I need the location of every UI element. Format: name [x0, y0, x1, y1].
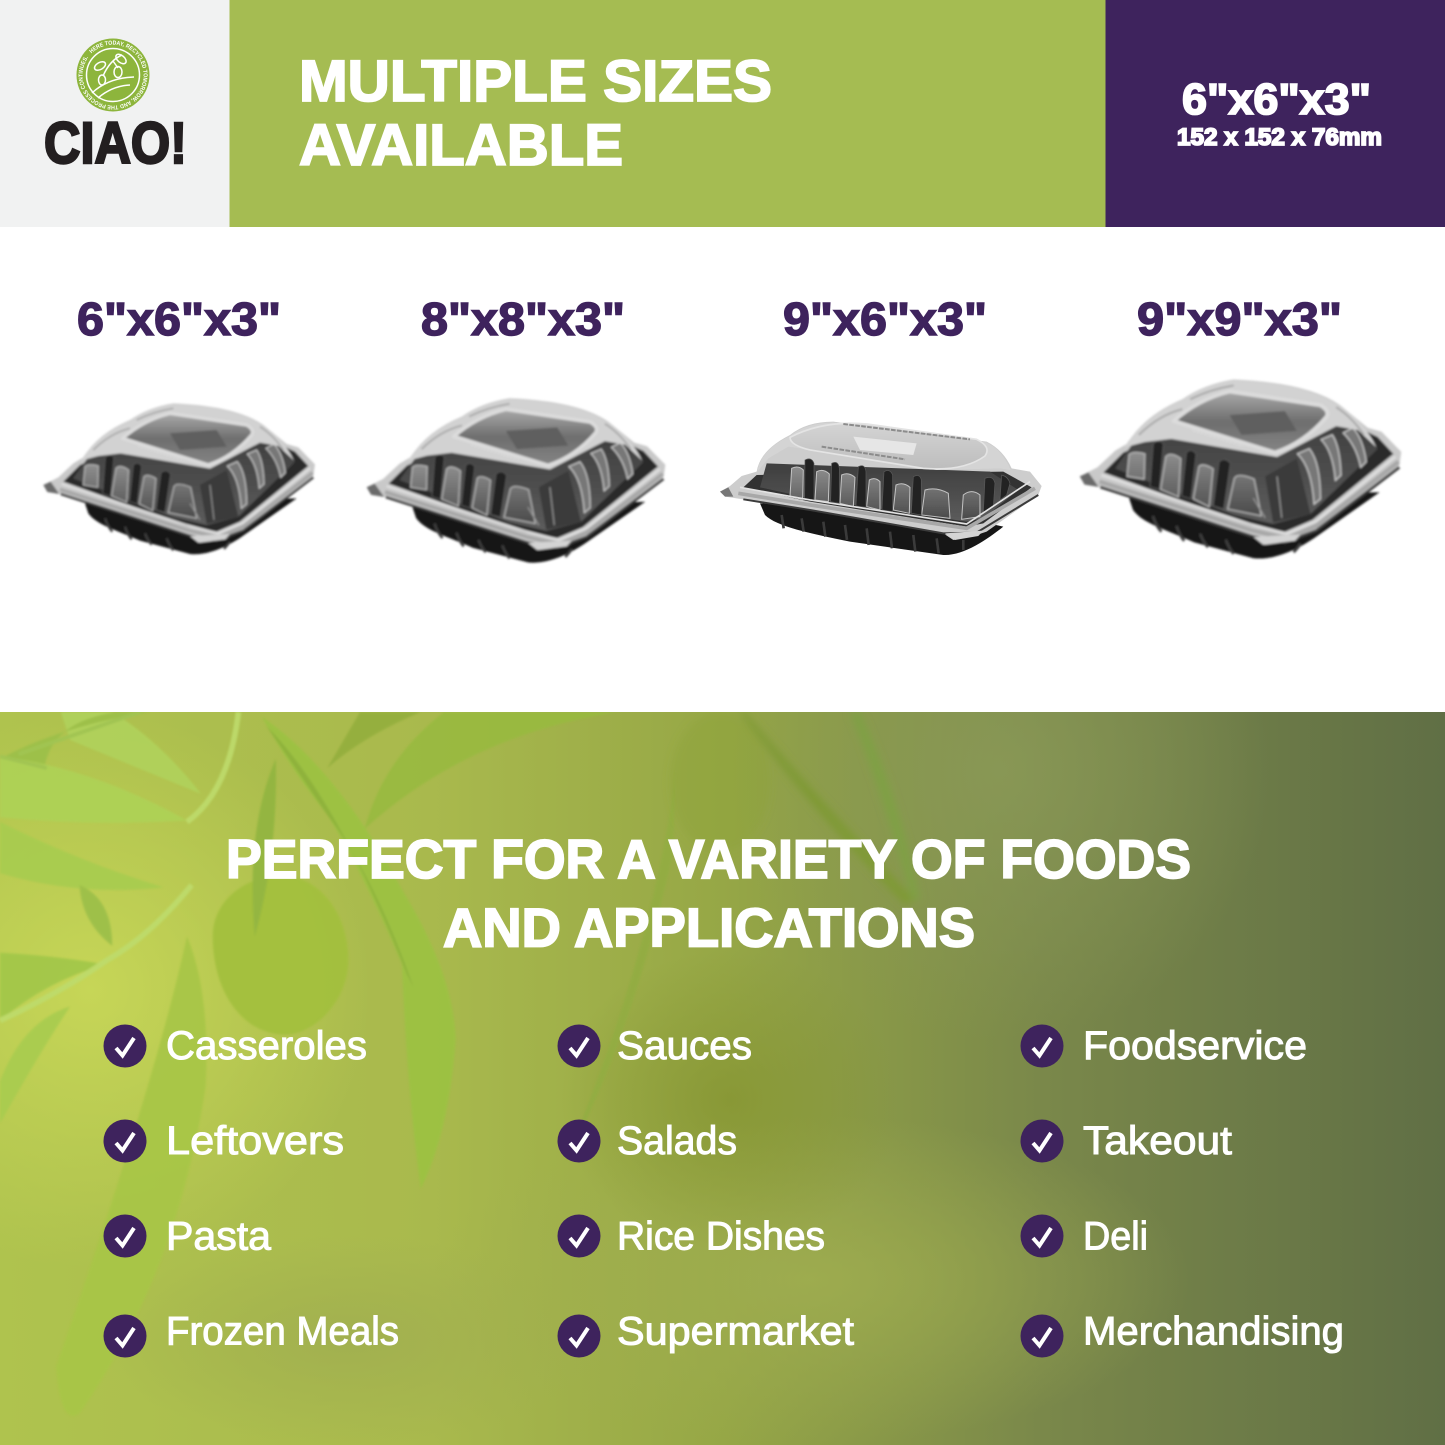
list item: Leftovers — [104, 1119, 344, 1163]
heading: AVAILABLE — [299, 113, 623, 178]
list item: Sauces — [558, 1024, 752, 1068]
size imperial: 6"x6"x3" — [1182, 75, 1371, 124]
heading: MULTIPLE SIZES — [299, 49, 772, 114]
list item: Casseroles: Casseroles — [166, 1024, 367, 1068]
list item: Supermarket: Supermarket — [617, 1310, 854, 1354]
product: 8x8x3 container — [367, 398, 665, 563]
size label 9x9x3: 9"x9"x3" — [1137, 293, 1342, 345]
list item: Leftovers: Leftovers — [166, 1119, 344, 1163]
list item: Pasta — [104, 1214, 272, 1258]
product: 6x6x3 container — [43, 403, 315, 554]
list item: Deli: Deli — [1083, 1214, 1148, 1258]
list item: Supermarket — [558, 1314, 854, 1358]
heading — [299, 49, 772, 178]
list item: Merchandising — [1020, 1314, 1342, 1358]
title — [228, 838, 1190, 948]
list item: Salads: Salads — [617, 1119, 737, 1163]
list item: Foodservice: Foodservice — [1083, 1024, 1307, 1068]
list item: Rice Dishes: Rice Dishes — [617, 1214, 825, 1258]
logo wordmark: CIAO! — [44, 111, 187, 176]
panel: size tag — [1106, 0, 1445, 227]
size label 8x8x3: 8"x8"x3" — [421, 293, 625, 345]
panel: heading band — [230, 0, 1106, 227]
list item: Sauces: Sauces — [617, 1024, 752, 1068]
panel: applications — [0, 712, 1445, 1445]
title: PERFECT FOR A VARIETY OF FOODS — [226, 828, 1191, 890]
size label 6x6x3: 6"x6"x3" — [77, 293, 281, 345]
size metric: 152 x 152 x 76mm — [1177, 124, 1382, 151]
list item: Takeout — [1020, 1119, 1232, 1163]
product: 9x9x3 container — [1080, 380, 1401, 559]
product: 9x6x3 container — [720, 422, 1042, 555]
background lighting — [0, 712, 1161, 1376]
list item: Frozen Meals: Frozen Meals — [166, 1310, 399, 1354]
panel: logo — [0, 0, 230, 227]
list item: Merchandising: Merchandising — [1083, 1310, 1344, 1354]
list item: Pasta: Pasta — [166, 1214, 272, 1258]
list item: Salads — [558, 1119, 737, 1163]
icon: olive branch badge: HERE TODAY, RECYCLED TOMORROW, AND THE PROCESS CONTINUES. — [78, 40, 148, 110]
list item: Deli — [1020, 1214, 1148, 1258]
title: AND APPLICATIONS — [443, 896, 975, 958]
list item: Frozen Meals — [104, 1314, 398, 1358]
thin leaves right — [742, 715, 916, 904]
olive branch photo backdrop — [0, 712, 660, 1302]
size label 9x6x3: 9"x6"x3" — [783, 293, 987, 345]
list item: Takeout: Takeout — [1083, 1119, 1232, 1163]
